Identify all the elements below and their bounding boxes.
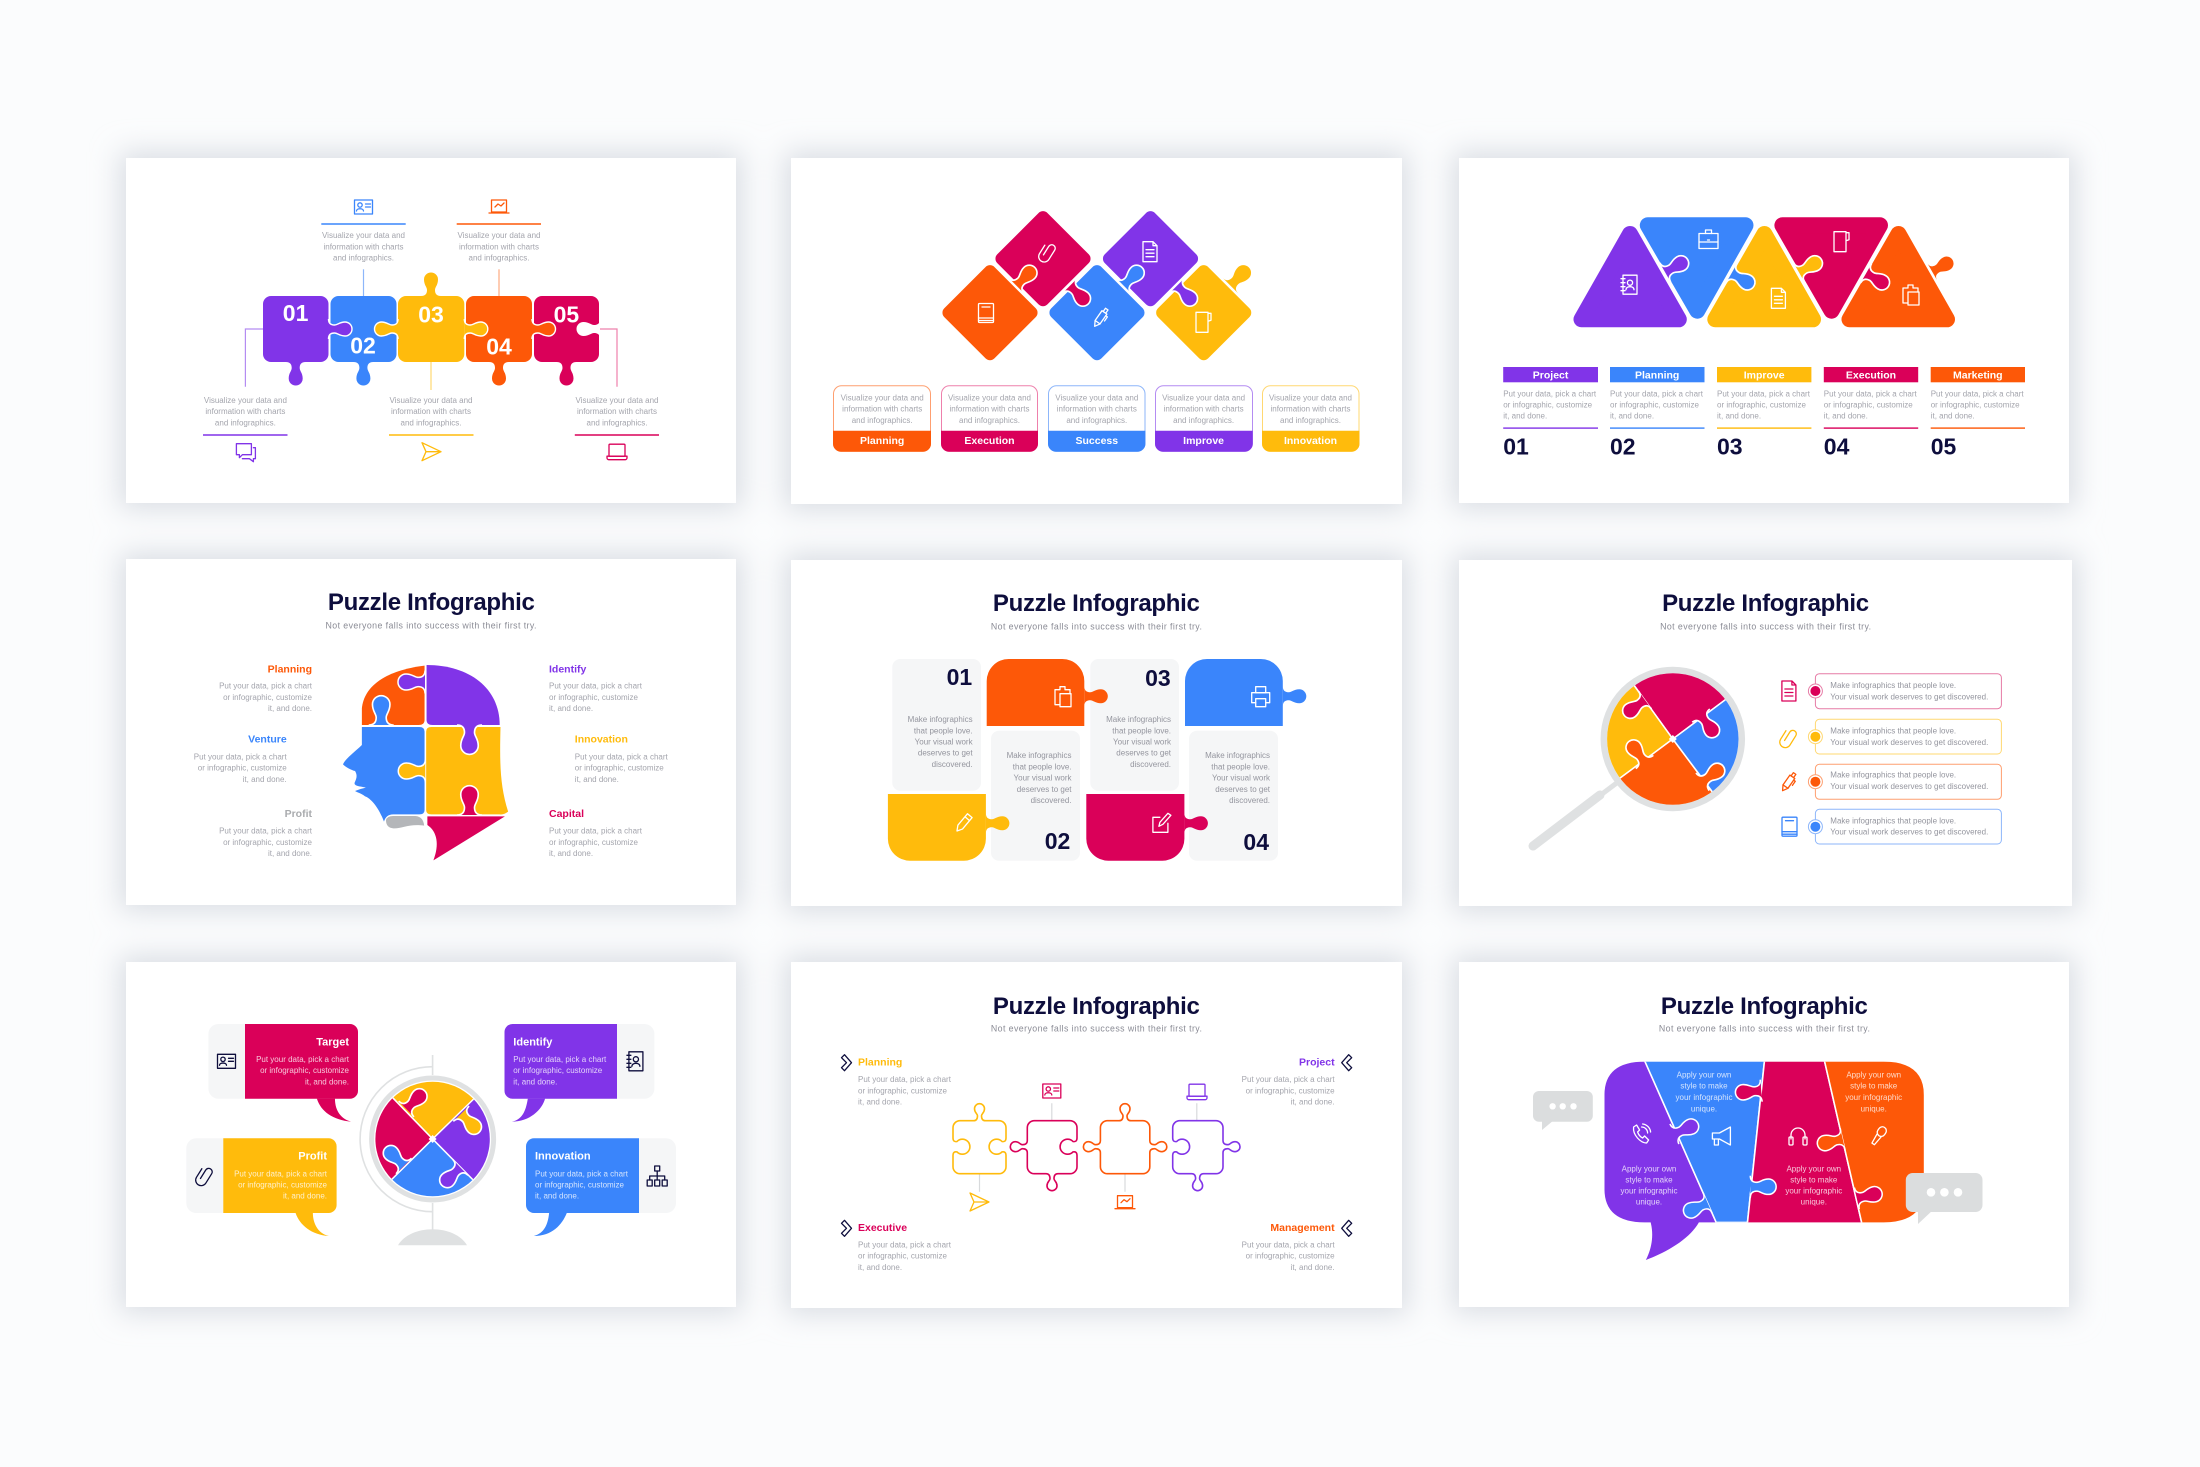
text: Planning: Planning [268,663,312,675]
text: Project: or infographic, customize [1246,1086,1335,1095]
top callout: blue [321,200,406,263]
column: Improve [1717,367,1811,460]
column: Planning: Put your data, pick a chart [1610,389,1704,398]
step 03 text: deserves to get [1116,749,1172,758]
row: orange: Make infographics that people love. [1830,771,1956,780]
top callout: blue: information with charts [323,243,404,252]
row: yellow: Make infographics that people love. [1830,727,1956,736]
bottom callout: purple [203,396,288,462]
row: orange [1780,764,2001,799]
outline icons [970,1084,1207,1211]
column: Project: Put your data, pick a chart [1503,389,1597,398]
step 04 text [1205,751,1271,855]
panel 4: puzzle head [126,559,736,905]
card: Execution: and infographics. [959,416,1020,425]
bottom callout: yellow: Visualize your data and [389,396,473,405]
puzzle numbers: 04 [486,334,512,360]
step 03 text: 03 [1145,665,1171,691]
card: Success: and infographics. [1066,416,1127,425]
callout: Profit: Put your data, pick a chart [234,1169,328,1178]
callout: Profit [186,1138,337,1236]
callout: Target [208,1024,358,1122]
blue block [1185,659,1306,726]
bubble text: crimson: style to make [1790,1175,1838,1184]
puzzle numbers: 03 [418,302,444,328]
bubble text: orange: Apply your own [1846,1071,1901,1080]
step 01 text: discovered. [932,760,973,769]
text: Management [1242,1220,1352,1272]
text: Venture: it, and done. [243,775,287,784]
text: Planning [842,1055,952,1106]
panel 6: magnifier puzzle [1459,560,2072,906]
text: Identify: or infographic, customize [549,693,638,702]
text: Venture: Venture [248,734,287,746]
magnifying glass [1528,666,1745,850]
card: Improve: Visualize your data and [1162,394,1245,403]
column: Planning: Planning [1635,370,1679,382]
bubble text: purple: unique. [1636,1198,1662,1207]
bubble text: orange: your infographic [1845,1093,1902,1102]
diamond pieces [939,208,1257,364]
step 04 text: deserves to get [1215,785,1271,794]
text: Capital: Put your data, pick a chart [549,827,643,836]
callout: Innovation: or infographic, customize [535,1180,624,1189]
panel 3: triangle puzzle [1459,158,2069,503]
step 02 text: Make infographics [1007,751,1072,760]
step 01 text: Your visual work [915,737,974,746]
bubble text: crimson: your infographic [1785,1187,1842,1196]
step 03 text: Make infographics [1106,715,1171,724]
text: Capital [549,808,643,858]
card: Innovation: Innovation [1284,435,1337,447]
column: Marketing: Put your data, pick a chart [1931,389,2024,398]
step 01 text: 01 [947,664,972,690]
column: Planning [1610,367,1704,460]
column: Execution: 04 [1824,434,1850,460]
title: Puzzle Infographic [993,590,1200,617]
text: Identify: Identify [549,663,586,675]
text: Innovation: Innovation [575,734,628,746]
top callout: orange: information with charts [459,243,539,252]
card: Success: Visualize your data and [1055,394,1138,403]
card: Planning: Visualize your data and [841,394,924,403]
title [1659,993,1870,1034]
triangle icons [1621,230,1919,308]
text: Profit [219,808,313,858]
bubble text: orange: unique. [1861,1104,1887,1113]
column: Project [1503,367,1598,460]
panel 8: outline puzzle [791,962,1402,1308]
callout: Innovation [526,1138,676,1236]
step 01 text [908,664,974,769]
card: Planning [833,386,931,452]
puzzle numbers: 02 [350,333,376,359]
grey cards [892,659,1278,861]
bottom callout: crimson: information with charts [577,407,657,416]
step 03 text: that people love. [1112,726,1171,735]
card: Execution: Execution [964,435,1015,447]
column: Marketing: it, and done. [1931,412,1975,421]
step 01 text: that people love. [914,726,973,735]
panel 5: four-step cards [791,560,1402,906]
text: Innovation [575,734,669,784]
bottom callout: purple: Visualize your data and [204,396,287,405]
title: Not everyone falls into success with their first try. [326,621,536,631]
globe [359,1055,496,1246]
card: Success: information with charts [1057,405,1137,414]
callout: Innovation: Put your data, pick a chart [535,1169,629,1178]
callout: Target: it, and done. [305,1077,349,1086]
text: Planning: or infographic, customize [223,693,313,702]
callout: Profit: it, and done. [283,1192,327,1201]
text: Management: it, and done. [1291,1263,1335,1272]
step 04 text: that people love. [1211,762,1270,771]
panel 1: numbered puzzle strip [126,158,736,503]
callout: Target: Target [316,1036,349,1048]
column: Improve: or infographic, customize [1717,400,1806,409]
bubble text: blue: unique. [1691,1104,1717,1113]
outline piece orange [1083,1104,1167,1174]
bottom callout: yellow: and infographics. [401,418,461,427]
column: Improve: it, and done. [1717,412,1761,421]
row: blue: Make infographics that people love. [1830,816,1956,825]
text: Executive: it, and done. [858,1263,902,1272]
bubble icons [1634,1124,1888,1146]
text: Management: or infographic, customize [1246,1252,1335,1261]
text: Planning: Put your data, pick a chart [219,682,313,691]
card: Planning: information with charts [842,405,922,414]
text: Innovation: it, and done. [575,775,619,784]
text: Planning: Planning [858,1056,902,1068]
text: Profit: Profit [285,808,312,820]
title [1660,590,1871,632]
row: blue [1782,809,2001,844]
column: Improve: Put your data, pick a chart [1717,389,1811,398]
column: Execution: Execution [1846,370,1896,382]
column: Planning: or infographic, customize [1610,400,1699,409]
card: Improve: information with charts [1164,405,1244,414]
text: Innovation: or infographic, customize [575,764,664,773]
panel 9: speech bubble puzzle [1459,962,2069,1307]
text: Project: Put your data, pick a chart [1242,1075,1335,1084]
callout: Target: or infographic, customize [260,1066,350,1075]
step 04 text: 04 [1243,829,1269,855]
column: Project: 01 [1503,434,1529,460]
text: Profit: Put your data, pick a chart [219,827,313,836]
text: Executive: Executive [858,1222,907,1234]
title: Puzzle Infographic [1662,590,1869,617]
bubble text: orange: style to make [1850,1082,1898,1091]
step 02 text: Your visual work [1014,774,1072,783]
bubble text: blue: style to make [1680,1082,1728,1091]
bottom callout: purple: information with charts [205,407,285,416]
row: yellow: Your visual work deserves to get discovered. [1830,738,1988,747]
text: Planning: it, and done. [268,704,312,713]
card: Execution: Visualize your data and [948,394,1031,403]
step 01 text: Make infographics [908,715,973,724]
text: Identify [549,663,643,713]
title: Puzzle Infographic [1661,993,1868,1020]
title: Puzzle Infographic [993,993,1200,1020]
column: Execution: it, and done. [1824,412,1868,421]
callout: Profit: Profit [298,1150,327,1162]
puzzle pieces [263,272,600,386]
text: Identify: it, and done. [549,704,593,713]
column: Marketing: 05 [1931,434,1956,460]
column: Project: or infographic, customize [1503,400,1593,409]
title: Puzzle Infographic [328,589,535,616]
card: Planning: Planning [860,435,904,447]
column: Execution: Put your data, pick a chart [1824,389,1918,398]
title [991,590,1202,632]
bottom callout: yellow [389,396,474,461]
step 01 text: deserves to get [918,749,973,758]
callout: Profit: or infographic, customize [238,1180,328,1189]
card: Improve [1155,386,1253,452]
yellow block [888,794,1009,861]
card: Improve: and infographics. [1173,416,1234,425]
text: Venture: or infographic, customize [198,764,287,773]
text: Project: Project [1299,1056,1335,1068]
text: Profit: or infographic, customize [223,838,313,847]
text: Capital: it, and done. [549,849,593,858]
large grey bubble [1906,1173,1982,1224]
row: crimson: Your visual work deserves to get discovered. [1830,692,1988,701]
card: Execution: information with charts [949,405,1030,414]
bottom callout: crimson [575,396,659,460]
callout: Innovation: Innovation [535,1150,591,1162]
title: Not everyone falls into success with their first try. [1659,1024,1870,1034]
column: Project: Project [1533,370,1569,382]
row: yellow [1778,719,2001,754]
step 04 text: Your visual work [1212,774,1271,783]
step 02 text: discovered. [1031,796,1072,805]
card: Innovation: information with charts [1270,405,1351,414]
connector lines [245,269,617,390]
column: Planning: 02 [1610,434,1636,460]
column: Execution [1824,367,1918,460]
panel shadows [120,152,2078,1314]
step 02 text: deserves to get [1017,785,1072,794]
text: Venture: Put your data, pick a chart [194,752,287,761]
puzzle speech bubble [1604,1062,1924,1260]
step 02 text: 02 [1045,828,1070,854]
top callout: orange: and infographics. [469,254,529,263]
bubble text: blue: your infographic [1676,1093,1732,1102]
top callout: blue: Visualize your data and [322,231,405,240]
row: orange: Your visual work deserves to get discovered. [1830,782,1988,791]
crimson block [1086,794,1208,861]
connector lines [980,1103,1197,1192]
step 03 text: discovered. [1130,760,1171,769]
step 04 text: Make infographics [1205,751,1270,760]
title: Not everyone falls into success with their first try. [1660,622,1871,632]
outline piece crimson [1010,1121,1077,1191]
callout: Innovation: it, and done. [535,1192,579,1201]
diamond icons [978,241,1211,332]
step 02 text: that people love. [1013,762,1072,771]
text: Venture [194,734,287,784]
row: blue: Your visual work deserves to get discovered. [1830,828,1988,837]
orange block [987,659,1108,726]
bubble text: purple: your infographic [1621,1187,1677,1196]
column: Marketing [1931,367,2025,460]
column: Improve: Improve [1744,370,1785,382]
text: Planning: Put your data, pick a chart [858,1075,952,1084]
text: Identify: Put your data, pick a chart [549,682,643,691]
title: Not everyone falls into success with their first try. [991,622,1202,632]
column: Execution: or infographic, customize [1824,400,1913,409]
text: Project: it, and done. [1291,1097,1335,1106]
text: Capital: Capital [549,808,584,820]
card: Improve: Improve [1183,435,1224,447]
puzzle numbers: 01 [283,300,309,326]
puzzle numbers: 05 [554,302,579,328]
callout: Identify: Identify [513,1036,553,1048]
callout: Identify [504,1024,654,1122]
panel 7: globe puzzle [126,962,736,1307]
column: Planning: it, and done. [1610,412,1654,421]
text: Executive: Put your data, pick a chart [858,1241,952,1250]
text: Executive: or infographic, customize [858,1252,947,1261]
card: Planning: and infographics. [852,416,913,425]
small grey bubble [1533,1091,1593,1130]
card: Success: Success [1075,435,1118,447]
step 02 text [1007,751,1072,854]
text: Capital: or infographic, customize [549,838,638,847]
bubble text: purple: Apply your own [1622,1164,1676,1173]
text: Planning [219,663,313,713]
text: Innovation: Put your data, pick a chart [575,752,669,761]
text: Profit: it, and done. [268,849,312,858]
text: Management: Management [1270,1222,1335,1234]
column: Improve: 03 [1717,434,1743,460]
panel 2: diamond puzzle [791,158,1402,504]
card: Innovation [1262,386,1360,452]
outline piece purple [1173,1121,1240,1191]
triangle pieces [1582,225,1958,319]
text: Project [1242,1055,1352,1106]
bubble text: blue: Apply your own [1677,1071,1731,1080]
title [991,993,1202,1034]
column: Project: it, and done. [1503,412,1547,421]
top callout: blue: and infographics. [333,254,394,263]
step 03 text [1106,665,1172,769]
text: Executive [842,1220,952,1272]
bubble text: crimson: Apply your own [1786,1164,1841,1173]
callout: Identify: Put your data, pick a chart [513,1055,607,1064]
callout: Identify: or infographic, customize [513,1066,603,1075]
card: Success [1048,386,1145,452]
text: Management: Put your data, pick a chart [1242,1241,1335,1250]
top callout: orange: Visualize your data and [457,231,541,240]
card: Execution [941,386,1038,452]
step 03 text: Your visual work [1113,737,1172,746]
bottom callout: crimson: and infographics. [587,418,647,427]
head illustration [343,665,508,860]
column: Marketing: or infographic, customize [1931,400,2020,409]
step 04 text: discovered. [1229,796,1270,805]
puzzle numbers [283,300,579,360]
title [326,589,536,631]
callout: Identify: it, and done. [513,1077,557,1086]
card: Innovation: Visualize your data and [1269,394,1352,403]
card: Innovation: and infographics. [1280,416,1341,425]
row: crimson [1782,674,2001,709]
callout: Target: Put your data, pick a chart [256,1055,350,1064]
column: Marketing: Marketing [1953,370,2003,382]
outline piece yellow [953,1104,1006,1174]
bottom callout: yellow: information with charts [391,407,471,416]
text: Planning: it, and done. [858,1097,902,1106]
bubble text: crimson: unique. [1801,1198,1827,1207]
bottom callout: crimson: Visualize your data and [575,396,659,405]
top callout: orange [457,200,541,263]
title: Not everyone falls into success with their first try. [991,1024,1202,1034]
row: crimson: Make infographics that people love. [1830,681,1956,690]
bubble text: purple: style to make [1625,1175,1673,1184]
text: Planning: or infographic, customize [858,1086,947,1095]
bottom callout: purple: and infographics. [215,418,276,427]
